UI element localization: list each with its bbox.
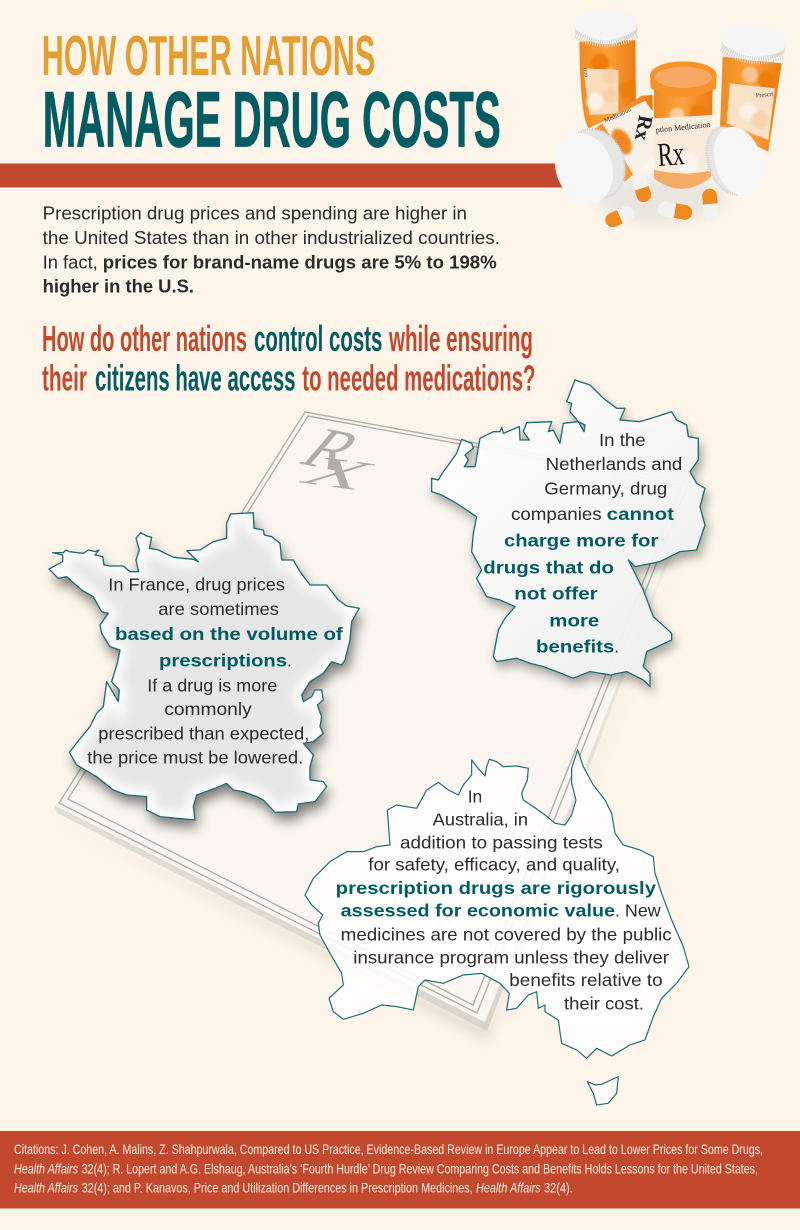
illustration: prescription pill bottles: tion — [581, 68, 589, 78]
text: Netherlands and Germany: . — [614, 636, 619, 656]
illustration: prescription pill bottles: Rx — [630, 113, 656, 143]
subheading question: to needed medications? — [302, 357, 536, 398]
text: Netherlands and Germany: companies — [511, 504, 602, 524]
text: Netherlands and Germany: Germany, drug — [544, 478, 667, 498]
citations band: Health Affairs — [476, 1180, 541, 1196]
panel: Australia — [305, 750, 689, 1105]
text: Australia — [336, 786, 672, 1013]
text: Australia: In — [468, 786, 482, 806]
text: Australia: addition to passing tests — [400, 832, 603, 852]
text: Netherlands and Germany: Netherlands and — [546, 454, 682, 474]
text: Netherlands and Germany: drugs that do — [483, 557, 614, 577]
text: Australia: prescription drugs are rigorously — [336, 878, 656, 898]
intro text: higher in the U.S. — [43, 276, 194, 296]
intro text: Prescription drug prices and spending are higher in — [43, 203, 467, 223]
text: Netherlands and Germany — [483, 430, 682, 656]
map: France — [49, 513, 359, 820]
intro text: the United States than in other industrialized countries. — [43, 228, 500, 248]
subheading question — [42, 318, 536, 398]
map: Netherlands and Germany — [432, 380, 705, 687]
text: Netherlands and Germany: benefits — [536, 636, 615, 656]
subheading question: control costs — [254, 318, 382, 359]
text: Netherlands and Germany: cannot — [607, 504, 674, 524]
text: France: commonly — [164, 699, 252, 719]
text: Netherlands and Germany: charge more for — [504, 531, 659, 551]
text: Australia: benefits relative to — [509, 970, 663, 990]
prescription paper background — [54, 410, 705, 1040]
title — [42, 24, 501, 164]
text: Netherlands and Germany: not offer — [514, 583, 598, 603]
citations band: 32(4); and P. Kanavos, Price and Utilization Differences in Prescription Medicines, — [82, 1180, 473, 1196]
text: France: In France, drug prices — [108, 575, 285, 595]
map: Australia — [305, 750, 689, 1058]
panel: France — [49, 513, 359, 820]
citations band: Health Affairs — [14, 1160, 78, 1176]
text: France: based on the volume of — [115, 624, 343, 644]
subheading question: their — [42, 357, 87, 398]
subheading question: How do other nations — [42, 318, 247, 359]
text: France: prescribed than expected, — [98, 723, 309, 743]
text: Australia: insurance program unless they deliver — [353, 947, 669, 967]
illustration: prescription pill bottles — [545, 9, 789, 230]
panel: Netherlands and Germany — [432, 380, 705, 687]
Rx symbol: X — [289, 448, 389, 498]
map: Tasmania — [587, 1077, 618, 1105]
Rx symbol: R — [287, 417, 377, 483]
intro text: In fact, — [43, 252, 98, 272]
text: Australia: their cost. — [564, 993, 644, 1013]
text: Netherlands and Germany: more — [549, 611, 600, 631]
text: France: prescriptions — [159, 651, 287, 671]
illustration: prescription pill bottles: ption Medication — [655, 120, 711, 135]
illustration: prescription pill bottles: Rx — [656, 135, 686, 174]
citations band: Health Affairs — [14, 1180, 78, 1196]
text: France: are sometimes — [158, 599, 279, 619]
text: Australia: . New — [615, 901, 661, 921]
intro text — [43, 203, 500, 296]
text: France: . — [287, 651, 292, 671]
text: Australia: assessed for economic value — [341, 901, 615, 921]
text: France — [87, 575, 343, 767]
illustration: prescription pill bottles: Prescri — [756, 91, 774, 99]
intro text: prices for brand-name drugs are 5% to 198% — [103, 252, 497, 272]
subheading question: citizens have access — [95, 357, 296, 398]
text: France: If a drug is more — [147, 676, 277, 696]
subheading question: while ensuring — [388, 318, 533, 359]
text: Australia: for safety, efficacy, and quality, — [368, 855, 620, 875]
text: Netherlands and Germany: In the — [599, 430, 646, 450]
red header band — [0, 164, 570, 188]
illustration: prescription pill bottles: Medication — [603, 106, 633, 124]
text: France: the price must be lowered. — [87, 747, 303, 767]
text: Australia: Australia, in — [433, 809, 528, 829]
citations band: 32(4). — [544, 1180, 573, 1196]
citations band — [0, 1131, 800, 1208]
text: Australia: medicines are not covered by the public — [341, 925, 672, 945]
title: HOW OTHER NATIONS — [42, 24, 375, 88]
